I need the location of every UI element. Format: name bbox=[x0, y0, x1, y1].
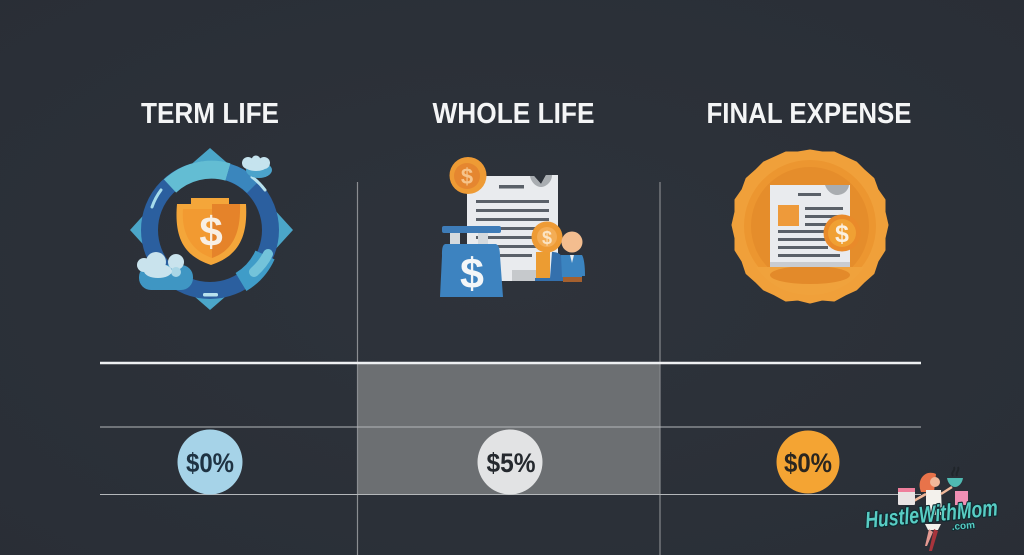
document bbox=[467, 175, 558, 281]
coin bbox=[824, 214, 860, 252]
icon: policy document with scale and people bbox=[440, 157, 585, 298]
coffee cup bbox=[947, 467, 963, 487]
icon: final expense seal bbox=[733, 151, 887, 302]
rate badge: final expense: $0% bbox=[784, 448, 832, 478]
icon: shield in ring with clouds bbox=[130, 148, 293, 310]
calendar bbox=[898, 488, 915, 505]
coin: $ bbox=[835, 220, 849, 248]
large cloud bbox=[137, 252, 193, 290]
rate badge: term life bbox=[178, 430, 242, 494]
heading: whole life: WHOLE LIFE bbox=[432, 98, 594, 130]
document bbox=[770, 185, 850, 267]
orange badge bbox=[450, 157, 486, 194]
coin and people: $ bbox=[542, 228, 552, 248]
comparison table grid bbox=[100, 182, 921, 555]
highlighted column band bbox=[358, 364, 660, 494]
logo: HustleWithMom bbox=[864, 467, 999, 551]
rate badge: whole life: $5% bbox=[486, 448, 536, 478]
heading: term life: TERM LIFE bbox=[141, 98, 279, 130]
orange badge: $ bbox=[461, 164, 473, 189]
scale: $ bbox=[460, 250, 484, 298]
rate badge: term life: $0% bbox=[186, 448, 234, 478]
heading: final expense: FINAL EXPENSE bbox=[706, 98, 912, 130]
small cloud bbox=[242, 156, 272, 178]
shopping bag bbox=[955, 491, 968, 505]
dollar sign: $ bbox=[199, 208, 223, 255]
figure bbox=[910, 473, 952, 551]
shield bbox=[176, 198, 246, 265]
coin and people bbox=[532, 222, 585, 282]
rate badge: final expense bbox=[776, 430, 840, 494]
scale bbox=[440, 226, 503, 298]
rate badge: whole life bbox=[478, 430, 542, 494]
logo domain: .com bbox=[951, 520, 976, 533]
scalloped seal bbox=[733, 151, 887, 302]
